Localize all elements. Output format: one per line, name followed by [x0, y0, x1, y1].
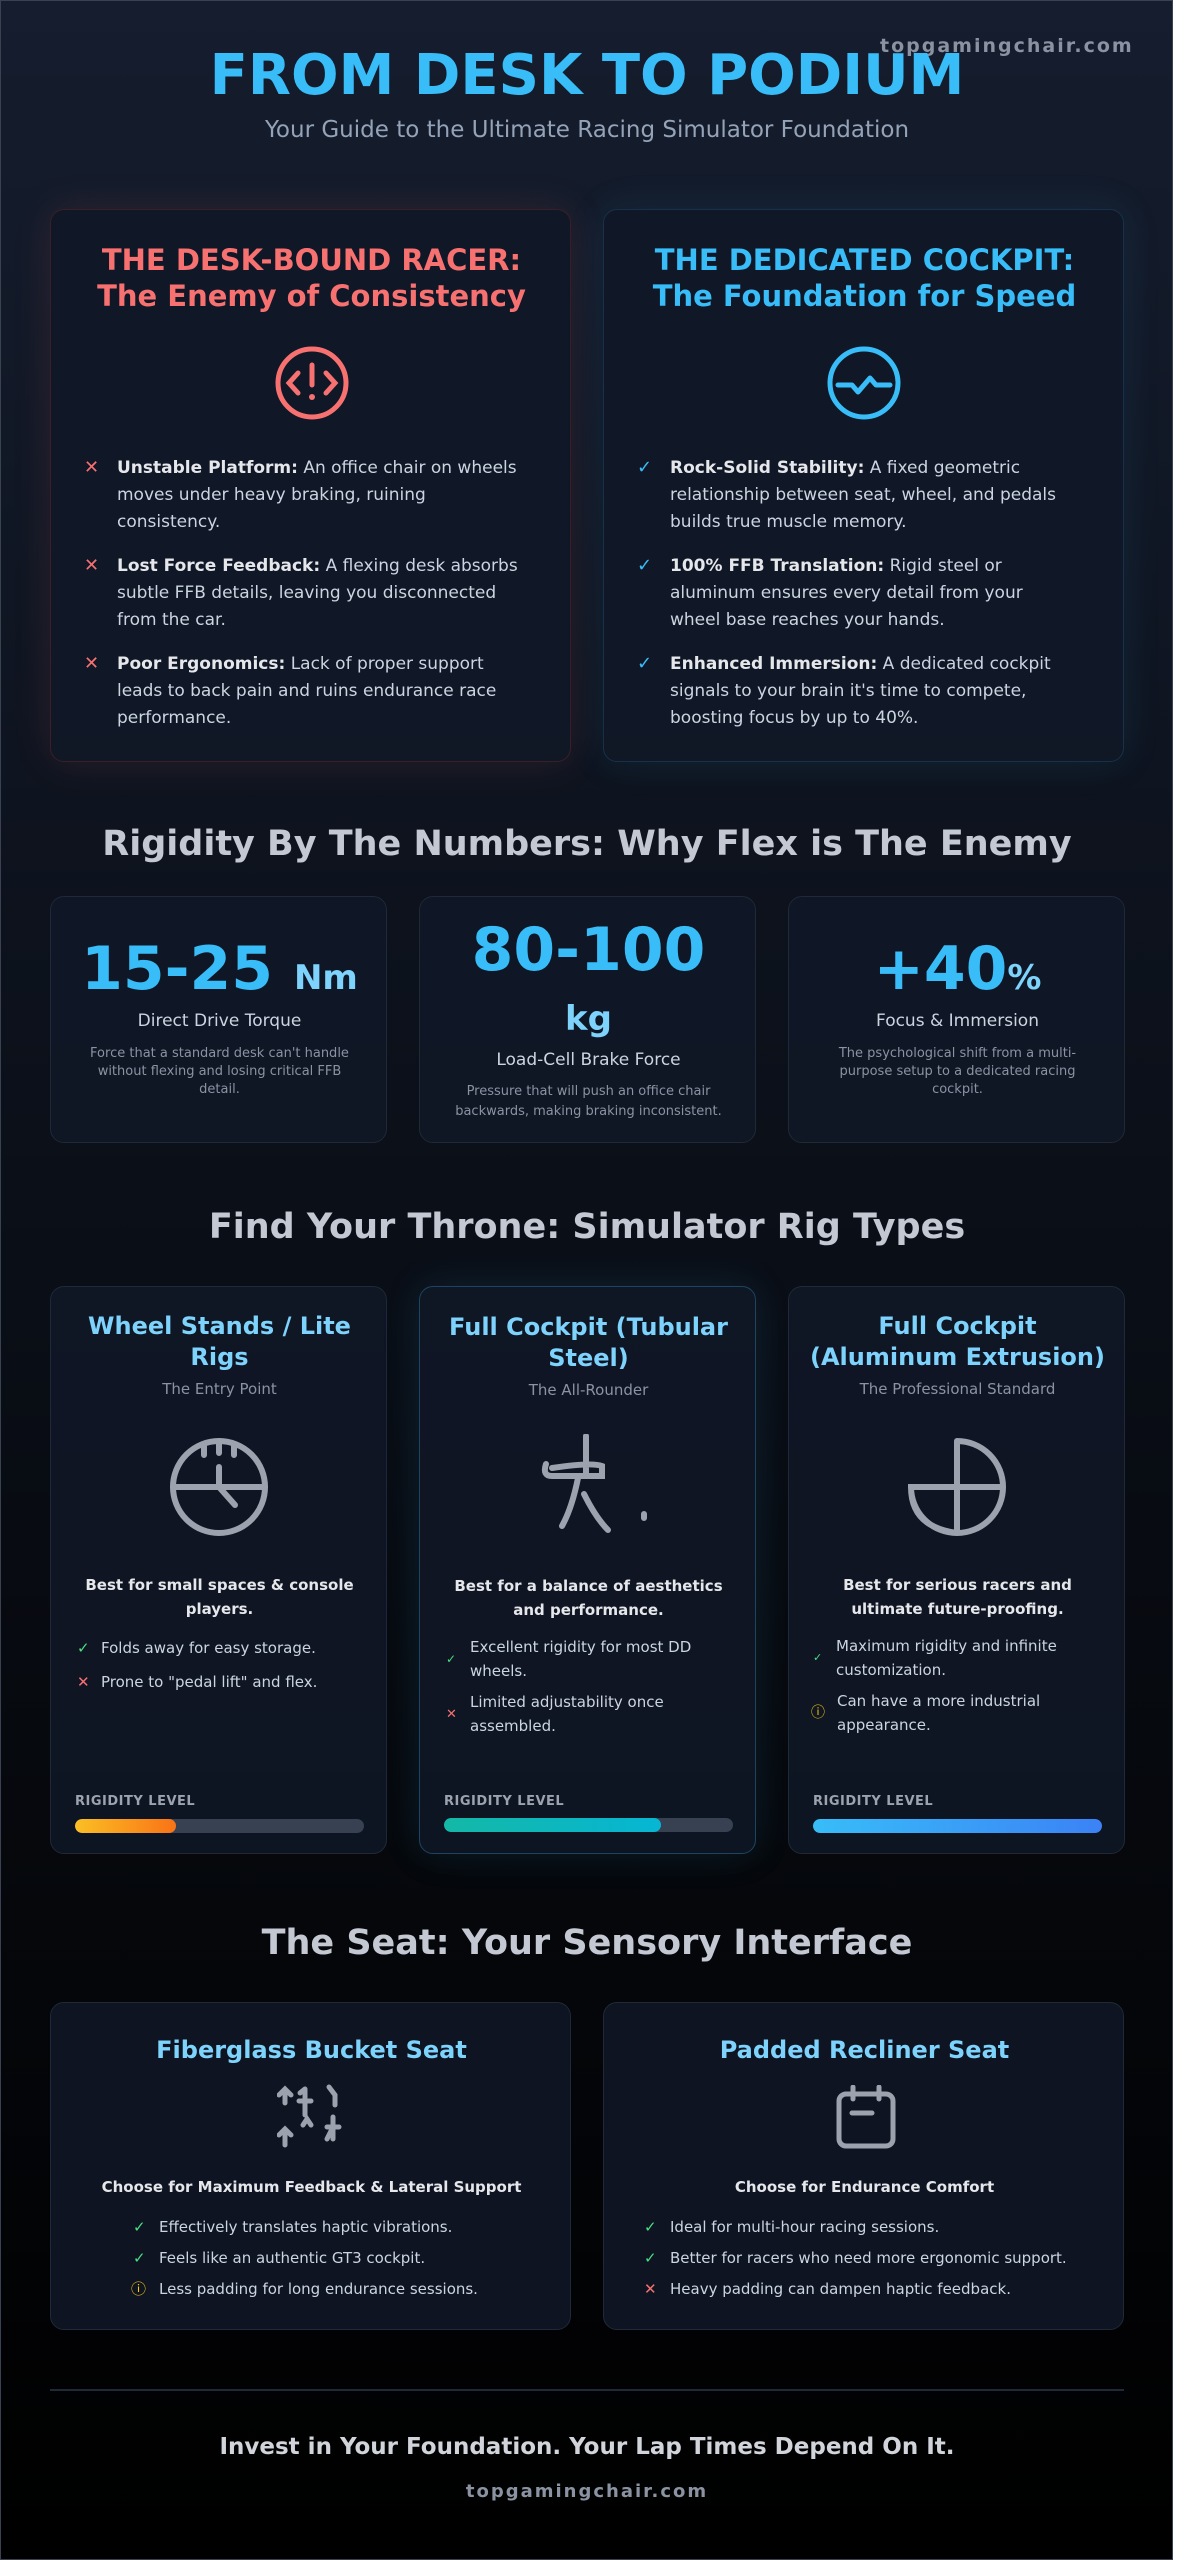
- panel: desk-bound racer: [50, 209, 571, 762]
- rig card: tubular steel: [419, 1286, 756, 1854]
- rig card: wheel stands: The Entry Point: [162, 1380, 277, 1398]
- rig card: aluminum: [788, 1286, 1125, 1854]
- stat card: brake force: [419, 896, 756, 1143]
- stat card: focus: The psychological shift from a multi-purpose setup to a dedicated racing cockpit.: [839, 1046, 1076, 1097]
- panel title: The Foundation for Speed: [653, 279, 1076, 313]
- list: benefits: ✓: [637, 555, 652, 576]
- icon: gauge: [170, 1438, 268, 1536]
- list: benefits: 100% FFB Translation: Rigid steel or aluminum ensures every detail from your wheel base reaches your hands.: [670, 556, 1023, 630]
- rig card: aluminum: ⓘ: [811, 1705, 825, 1721]
- subtitle: Your Guide to the Ultimate Racing Simulator Foundation: [265, 117, 909, 143]
- stat card: focus: +40%: [874, 934, 1041, 1004]
- rig card: wheel stands: RIGIDITY LEVEL: [75, 1794, 195, 1809]
- seat card: recliner: ✕: [644, 2280, 657, 2298]
- rig card: wheel stands: Wheel Stands / Lite Rigs: [88, 1312, 351, 1371]
- list: problems: ✕: [84, 555, 99, 576]
- footer tagline: Invest in Your Foundation. Your Lap Times Depend On It.: [219, 2434, 955, 2460]
- panel title: [97, 243, 526, 313]
- rig card: tubular steel: Excellent rigidity for most DD wheels.: [470, 1638, 691, 1680]
- stat card: brake force: 80-100: [472, 915, 705, 985]
- seat card: recliner: Ideal for multi-hour racing sessions.: [670, 2218, 939, 2236]
- rig card: tubular steel: RIGIDITY LEVEL: [444, 1794, 564, 1809]
- stat card: torque: Direct Drive Torque: [138, 1011, 301, 1031]
- icon: warning: [276, 346, 348, 420]
- seat card: fiberglass: Less padding for long endurance sessions.: [159, 2280, 478, 2298]
- stat card: focus: [788, 896, 1125, 1143]
- seat card: fiberglass: ✓: [133, 2249, 146, 2267]
- seat card: recliner: ✓: [644, 2249, 657, 2267]
- icon: calendar: [836, 2085, 896, 2148]
- bar: rigidity: [444, 1818, 733, 1832]
- panel title: [652, 243, 1076, 313]
- list: problems: Unstable Platform: An office chair on wheels moves under heavy braking, ruining consistency.: [117, 458, 517, 532]
- icon: check gauge: [828, 346, 900, 420]
- stat card: torque: 15-25 Nm: [81, 934, 358, 1004]
- rig card: wheel stands: Prone to "pedal lift" and flex.: [101, 1673, 317, 1691]
- heading: seat: The Seat: Your Sensory Interface: [262, 1923, 912, 1963]
- rig card: aluminum: Maximum rigidity and infinite customization.: [836, 1637, 1057, 1679]
- seat card: fiberglass: Choose for Maximum Feedback & Lateral Support: [102, 2178, 521, 2196]
- bar: rigidity: [813, 1819, 1102, 1833]
- seat card: fiberglass: [50, 2002, 571, 2330]
- panel title: The Enemy of Consistency: [97, 279, 526, 313]
- stat card: brake force: Load-Cell Brake Force: [496, 1050, 681, 1070]
- rig card: aluminum: Best for serious racers and ultimate future-proofing.: [843, 1576, 1072, 1618]
- stat card: torque: [50, 896, 387, 1143]
- rig card: wheel stands: ✕: [77, 1673, 90, 1691]
- list: benefits: ✓: [637, 457, 652, 478]
- seat card: recliner: Padded Recliner Seat: [720, 2036, 1009, 2064]
- list: problems: Poor Ergonomics: Lack of proper support leads to back pain and ruins endurance race performance.: [117, 654, 496, 728]
- seat card: fiberglass: Fiberglass Bucket Seat: [156, 2036, 467, 2064]
- site label top: topgamingchair.com: [880, 35, 1134, 57]
- list: problems: ✕: [84, 653, 99, 674]
- rig card: tubular steel: Best for a balance of aesthetics and performance.: [454, 1577, 723, 1619]
- seat card: recliner: Choose for Endurance Comfort: [735, 2178, 994, 2196]
- icon: vibration arrows: [277, 2084, 342, 2148]
- seat card: fiberglass: Effectively translates haptic vibrations.: [159, 2218, 452, 2236]
- heading: rigidity: Rigidity By The Numbers: Why Flex is The Enemy: [102, 824, 1072, 864]
- heading: rig types: Find Your Throne: Simulator Rig Types: [209, 1207, 965, 1247]
- rig card: aluminum: Full Cockpit (Aluminum Extrusion): [810, 1312, 1105, 1371]
- rig card: aluminum: RIGIDITY LEVEL: [813, 1794, 933, 1809]
- rig card: tubular steel: ✕: [446, 1707, 457, 1722]
- stat card: brake force: Pressure that will push an office chair backwards, making braking inconsistent.: [455, 1084, 722, 1119]
- seat card: recliner: Better for racers who need more ergonomic support.: [670, 2249, 1067, 2267]
- rig card: tubular steel: ✓: [446, 1652, 456, 1666]
- rig card: tubular steel: Full Cockpit (Tubular Steel): [449, 1313, 728, 1372]
- rig card: wheel stands: Best for small spaces & console players.: [85, 1576, 354, 1618]
- rig card: wheel stands: Folds away for easy storage.: [101, 1639, 316, 1657]
- list: benefits: Enhanced Immersion: A dedicated cockpit signals to your brain it's time to compete, boosting focus by up to 40%.: [670, 654, 1051, 728]
- bar: rigidity: [75, 1819, 364, 1833]
- rig card: tubular steel: Limited adjustability once assembled.: [470, 1693, 664, 1735]
- panel title: THE DEDICATED COCKPIT:: [655, 243, 1074, 277]
- panel title: THE DESK-BOUND RACER:: [102, 243, 521, 277]
- icon: frame: [542, 1434, 647, 1533]
- rig card: wheel stands: [50, 1286, 387, 1854]
- list: benefits: [637, 457, 1056, 728]
- list: problems: Lost Force Feedback: A flexing desk absorbs subtle FFB details, leaving you disconnected from the car.: [117, 556, 518, 630]
- list: problems: [84, 457, 518, 728]
- seat card: fiberglass: Feels like an authentic GT3 cockpit.: [159, 2249, 425, 2267]
- seat card: recliner: ✓: [644, 2218, 657, 2236]
- footer site: topgamingchair.com: [466, 2481, 708, 2502]
- rig card: tubular steel: The All-Rounder: [529, 1381, 648, 1399]
- stat card: brake force: kg: [565, 999, 612, 1039]
- list: problems: ✕: [84, 457, 99, 478]
- seat card: recliner: Heavy padding can dampen haptic feedback.: [670, 2280, 1011, 2298]
- seat card: fiberglass: ✓: [133, 2218, 146, 2236]
- rig card: aluminum: ✓: [813, 1651, 822, 1664]
- rig card: wheel stands: ✓: [77, 1639, 90, 1657]
- seat card: recliner: [603, 2002, 1124, 2330]
- stat card: torque: Force that a standard desk can't handle without flexing and losing critical FFB detail.: [90, 1046, 349, 1097]
- title: FROM DESK TO PODIUM: [210, 43, 964, 108]
- rig card: aluminum: Can have a more industrial appearance.: [837, 1692, 1040, 1734]
- list: benefits: ✓: [637, 653, 652, 674]
- rig card: aluminum: The Professional Standard: [860, 1380, 1055, 1398]
- stat card: focus: Focus & Immersion: [876, 1011, 1039, 1031]
- panel: dedicated cockpit: [603, 209, 1124, 762]
- list: benefits: Rock-Solid Stability: A fixed geometric relationship between seat, wheel, and pedals builds true muscle memory.: [670, 458, 1056, 532]
- seat card: fiberglass: ⓘ: [131, 2280, 146, 2298]
- icon: pie: [908, 1438, 1006, 1536]
